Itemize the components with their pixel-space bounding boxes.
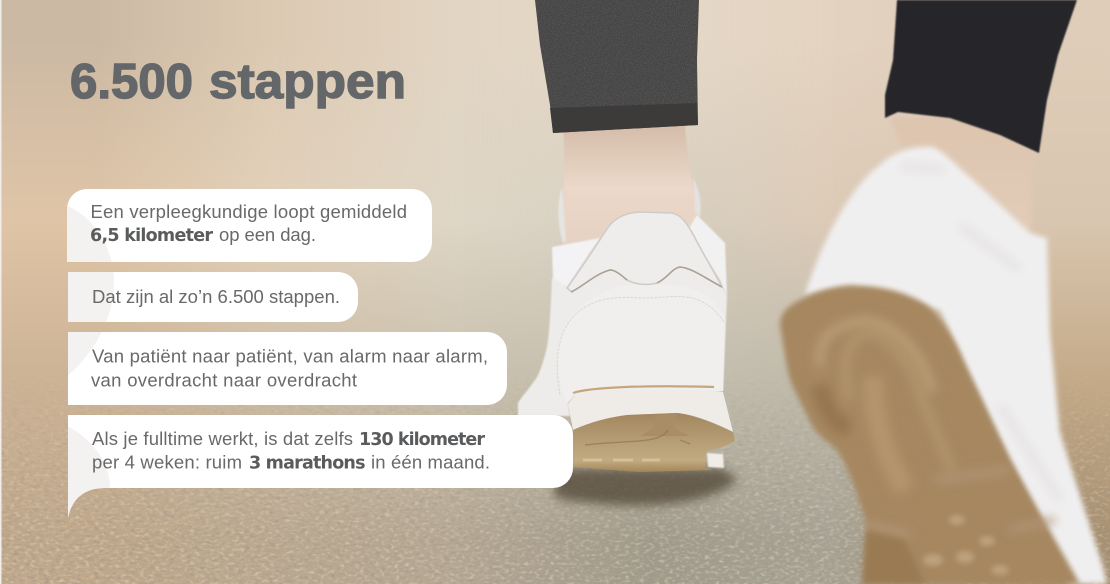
title: stappen <box>209 55 406 109</box>
shoe shading <box>900 166 1060 500</box>
bubble 2 text: Dat zijn al zo’n 6.500 stappen. <box>92 286 340 307</box>
bubble 1 text: Een verpleegkundige loopt gemiddeld <box>90 201 407 222</box>
counter panel <box>558 285 725 403</box>
stitching <box>557 297 724 395</box>
left ankle <box>562 124 698 265</box>
bubble 4 text: per 4 weken: ruim <box>92 452 242 472</box>
right shoe <box>780 147 1107 584</box>
bubble 4 text: in één maand. <box>371 452 490 472</box>
bubble 4 text: 3 marathons <box>249 454 366 474</box>
shoe upper <box>805 147 1107 584</box>
sole white fleck <box>707 453 724 468</box>
bubble 3 text <box>91 346 488 390</box>
bubble 4 text: 130 kilometer <box>359 430 485 450</box>
title: 6.500 <box>70 55 193 109</box>
bubble shapes <box>67 189 573 518</box>
left leg <box>535 0 699 265</box>
tan seam <box>573 386 714 393</box>
title <box>70 55 406 109</box>
left trouser leg <box>535 0 699 133</box>
heel tab <box>567 212 722 292</box>
bubble 3 text: van overdracht naar overdracht <box>91 370 357 390</box>
tread pattern <box>820 320 1055 535</box>
sole tab <box>640 414 690 436</box>
bubble 4 text <box>92 428 490 474</box>
bubble 3 text: Van patiënt naar patiënt, van alarm naar alarm, <box>92 346 488 366</box>
tread blobs <box>923 515 1009 575</box>
faint bubble overlay <box>67 206 114 518</box>
bubble 1 text <box>90 201 407 246</box>
right leg <box>885 0 1077 238</box>
sock <box>552 178 727 297</box>
outsole <box>780 286 1080 584</box>
left shoe <box>518 178 735 472</box>
right trouser leg <box>885 0 1077 153</box>
bubble 4 text: Als je fulltime werkt, is dat zelfs <box>92 428 353 449</box>
midsole <box>568 389 733 432</box>
speech bubbles <box>60 189 573 520</box>
right ankle <box>890 118 1032 238</box>
bubble 1 text: 6,5 kilometer <box>90 226 213 246</box>
shoe upper <box>518 250 727 416</box>
bubble 1 text: op een dag. <box>219 224 316 245</box>
outsole <box>573 413 735 472</box>
